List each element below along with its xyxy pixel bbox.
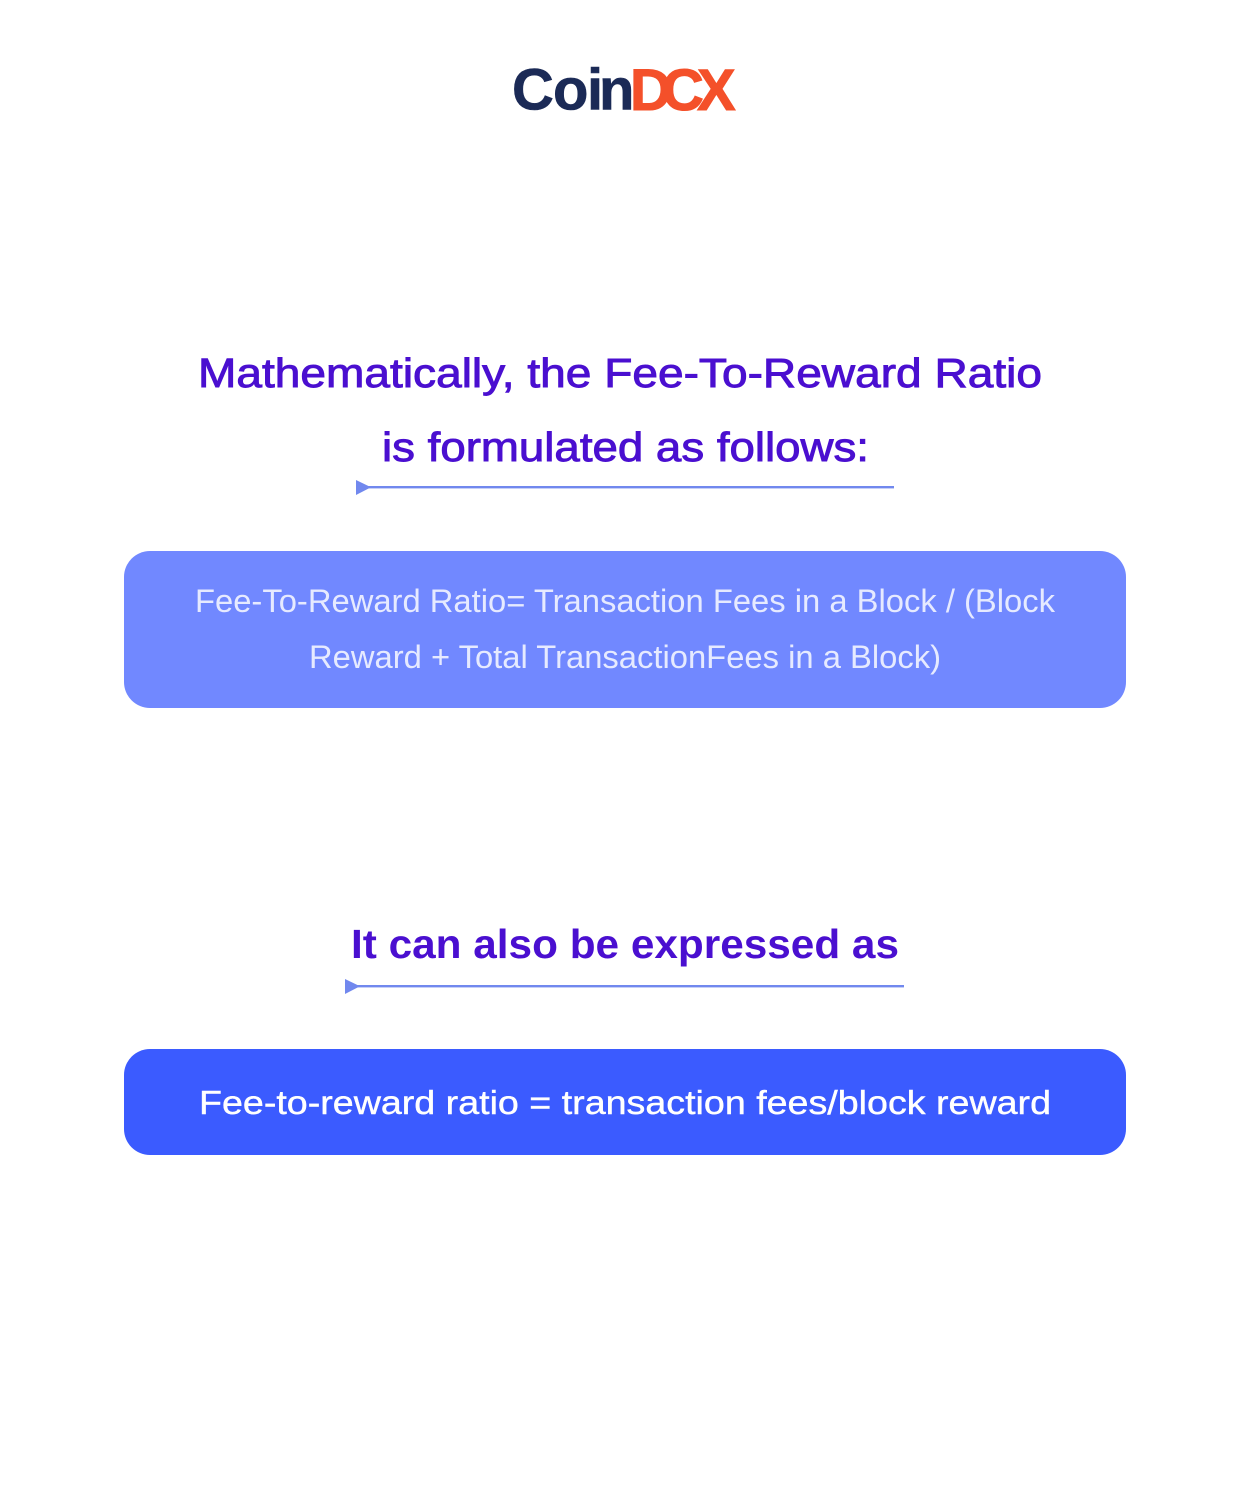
heading: alternative expression: It can also be expressed as: [351, 921, 899, 967]
heading: fee-to-reward ratio formula: Mathematically, the Fee-To-Reward Ratio: [198, 350, 1042, 396]
formula text: Fee-To-Reward Ratio= Transaction Fees in a Block / (Block: [195, 583, 1056, 619]
logo: CoinDCX: Coin: [512, 58, 634, 122]
heading: fee-to-reward ratio formula: is formulated as follows:: [382, 424, 869, 470]
formula text: [195, 583, 1056, 675]
formula text: Reward + Total TransactionFees in a Block): [309, 639, 941, 675]
logo: CoinDCX: [512, 58, 736, 123]
panel: full formula: [124, 551, 1126, 708]
simplified formula text: Fee-to-reward ratio = transaction fees/block reward: [199, 1084, 1051, 1121]
arrow underline: first heading: [356, 480, 894, 495]
heading: fee-to-reward ratio formula: [198, 350, 1042, 470]
arrow underline: second heading: [345, 979, 904, 994]
panel: simplified formula: [124, 1049, 1126, 1155]
logo: CoinDCX: DCX: [630, 58, 736, 123]
